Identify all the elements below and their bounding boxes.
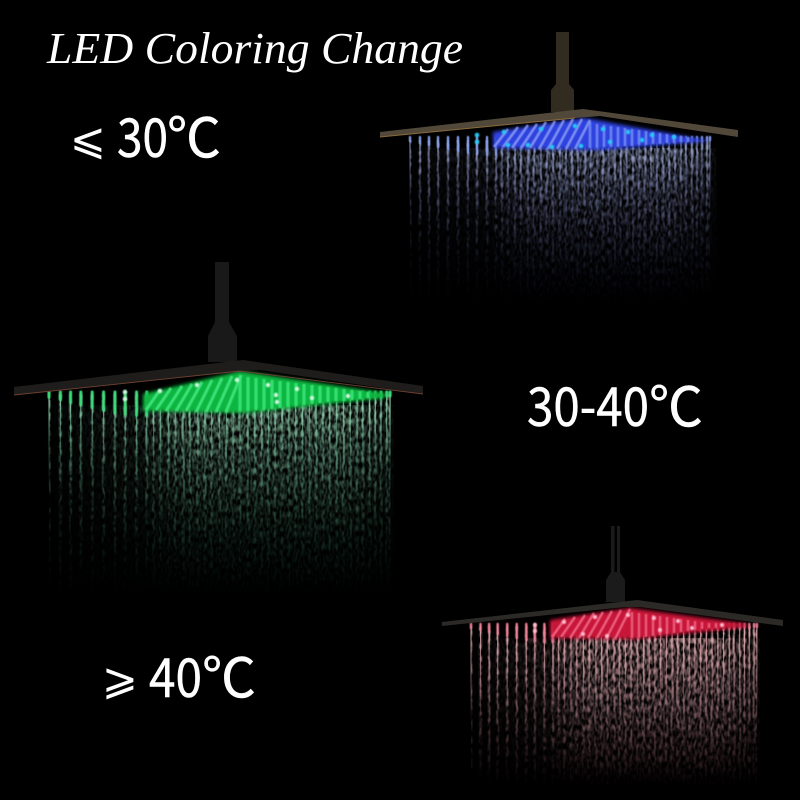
label: at most 30 degrees: ⩽ [70,114,106,165]
panel: green [14,360,423,395]
rain: green [44,392,394,600]
label: at most 30 degrees [70,94,221,173]
label: 30 to 40 degrees: ℃ [649,363,703,442]
shower head: green [14,262,423,600]
rain: red [468,624,760,788]
rain: blue [405,137,717,308]
stem: blue [551,32,574,112]
panel: red [442,600,783,626]
label: at most 30 degrees: ℃ [167,94,221,173]
shower head: blue [380,32,738,308]
label: at most 30 degrees: 30 [117,94,168,173]
stem: red [606,526,625,602]
LED glow: green [125,371,385,413]
label: at least 40 degrees: 40 [149,634,202,713]
panel: blue [380,109,738,137]
label: at least 40 degrees [102,634,256,713]
label: 30 to 40 degrees: 30-40 [527,363,649,442]
LED glow: red [535,608,748,639]
shower head: red [442,526,783,788]
label: at least 40 degrees: ⩾ [102,654,138,705]
stem: green [208,262,237,362]
label: at least 40 degrees: ℃ [202,634,256,713]
LED glow: blue [477,118,711,150]
title: LED Coloring Change [46,24,463,73]
